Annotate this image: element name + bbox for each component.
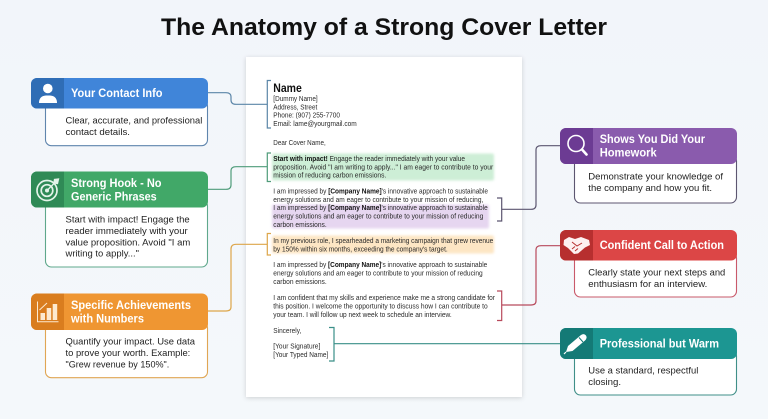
highlight: achievement paragraph xyxy=(272,236,494,254)
paragraph: company research: energy solutions and am eager to contribute to your mission of reducing xyxy=(273,214,483,220)
connector: achievements xyxy=(208,234,271,311)
closing block: [Your Signature] xyxy=(273,344,320,351)
heading: Your Contact Info xyxy=(71,88,162,100)
paragraph: call to action: this position. I welcome the opportunity to discuss how I can contribute to xyxy=(273,304,488,310)
paragraph: company repeat xyxy=(273,262,487,286)
connector: contact info xyxy=(208,80,271,128)
connector: call to action xyxy=(497,246,560,320)
panel: specific achievements xyxy=(31,294,208,378)
icon: pen xyxy=(560,328,593,359)
body text xyxy=(65,214,190,260)
heading: Strong Hook - No xyxy=(71,178,162,190)
paragraph: achievements xyxy=(273,238,493,253)
paragraph: call to action: your team. I will follow up next week to schedule an interview. xyxy=(273,312,452,319)
body text: Start with impact! Engage the xyxy=(66,214,190,226)
body text: enthusiasm for an interview. xyxy=(588,279,707,290)
letter header text: Email: lame@yourgmail.com xyxy=(273,121,357,128)
icon: handshake xyxy=(560,230,593,260)
body text: reader immediately with your xyxy=(66,226,188,237)
paragraph: company research: energy solutions and am eager to contribute to your mission of reducing, xyxy=(273,197,483,204)
letter header text: Phone: (907) 255-7700 xyxy=(273,113,340,120)
letter header text: Address, Street xyxy=(273,104,317,111)
letter header text: Name xyxy=(273,81,302,95)
body text: value proposition. Avoid "I am xyxy=(66,237,190,248)
paragraph: strong hook: proposition. Avoid "I am writing to apply..." I am eager to contribute to your xyxy=(273,164,494,171)
highlight: homework paragraph xyxy=(272,204,489,228)
closing block xyxy=(273,328,328,359)
connector: closing xyxy=(329,328,560,361)
body text: closing. xyxy=(588,377,621,388)
panel: cover letter page xyxy=(246,57,522,397)
body text: to prove your worth. Example: xyxy=(66,348,190,359)
body text: Clearly state your next steps and xyxy=(588,268,725,278)
letter header text xyxy=(273,81,357,128)
heading: with Numbers xyxy=(70,314,144,326)
closing block: [Your Typed Name] xyxy=(273,352,328,359)
icon: person xyxy=(31,78,64,108)
body text: contact details. xyxy=(66,127,130,138)
heading xyxy=(71,178,162,203)
paragraph: company repeat: I am impressed by [Company Name]'s innovative approach to sustainable xyxy=(273,262,487,269)
paragraph: strong hook xyxy=(273,156,494,180)
highlight: hook paragraph xyxy=(272,154,494,180)
paragraph: call to action xyxy=(273,295,496,319)
paragraph: company repeat: carbon emissions. xyxy=(273,279,327,286)
heading: Homework xyxy=(600,148,657,160)
paragraph: call to action: I am confident that my skills and experience make me a strong candidate for xyxy=(273,295,496,302)
panel: professional but warm xyxy=(560,328,737,395)
heading xyxy=(600,134,705,160)
paragraph: achievements: In my previous role, I spearheaded a marketing campaign that grew revenue xyxy=(273,238,493,245)
icon: target xyxy=(31,172,64,208)
icon: bar chart xyxy=(31,294,64,330)
paragraph: company research: I am impressed by [Company Name]'s innovative approach to sustainable xyxy=(273,205,488,212)
body text: writing to apply..." xyxy=(65,249,139,260)
paragraph: company research: I am impressed by [Company Name]'s innovative approach to sustainable xyxy=(273,189,488,196)
body text xyxy=(66,337,196,370)
paragraph: strong hook: Start with impact! Engage the reader immediately with your value xyxy=(273,156,465,163)
body text: Use a standard, respectful xyxy=(588,366,698,376)
heading: Generic Phrases xyxy=(71,191,157,203)
panel: your contact info xyxy=(31,78,208,146)
body text: Demonstrate your knowledge of xyxy=(588,172,723,182)
salutation: Dear Cover Name, xyxy=(273,140,326,147)
heading: Professional but Warm xyxy=(600,338,719,350)
paragraph: company repeat: energy solutions and am eager to contribute to your mission of reducing xyxy=(273,270,483,278)
panel: strong hook xyxy=(31,172,208,267)
closing block: Sincerely, xyxy=(273,328,301,335)
body text xyxy=(588,366,698,388)
heading: Specific Achievements xyxy=(71,300,191,312)
connector: strong hook xyxy=(208,153,271,189)
paragraph: strong hook: mission of reducing carbon emissions. xyxy=(273,173,386,180)
panel: shows you did your homework xyxy=(560,128,737,203)
paragraph: company research xyxy=(273,189,488,229)
letter header text: [Dummy Name] xyxy=(273,96,318,103)
body text: the company and how you fit. xyxy=(588,183,712,194)
body text: Quantify your impact. Use data xyxy=(66,337,196,348)
panel: confident call to action xyxy=(560,230,737,297)
heading: Confident Call to Action xyxy=(600,240,724,252)
body text xyxy=(588,268,725,290)
heading: Shows You Did Your xyxy=(600,134,705,146)
body text xyxy=(66,116,202,138)
title: The Anatomy of a Strong Cover Letter xyxy=(161,14,607,41)
paragraph: company research: carbon emissions. xyxy=(273,222,327,229)
heading xyxy=(70,300,191,326)
body text xyxy=(588,172,723,194)
paragraph: achievements: by 150% within six months, exceeding the company's target. xyxy=(273,246,448,253)
body text: Clear, accurate, and professional xyxy=(66,116,202,126)
body text: "Grew revenue by 150%". xyxy=(66,360,169,370)
icon: magnifying glass xyxy=(560,128,593,164)
connector: homework xyxy=(497,146,560,221)
